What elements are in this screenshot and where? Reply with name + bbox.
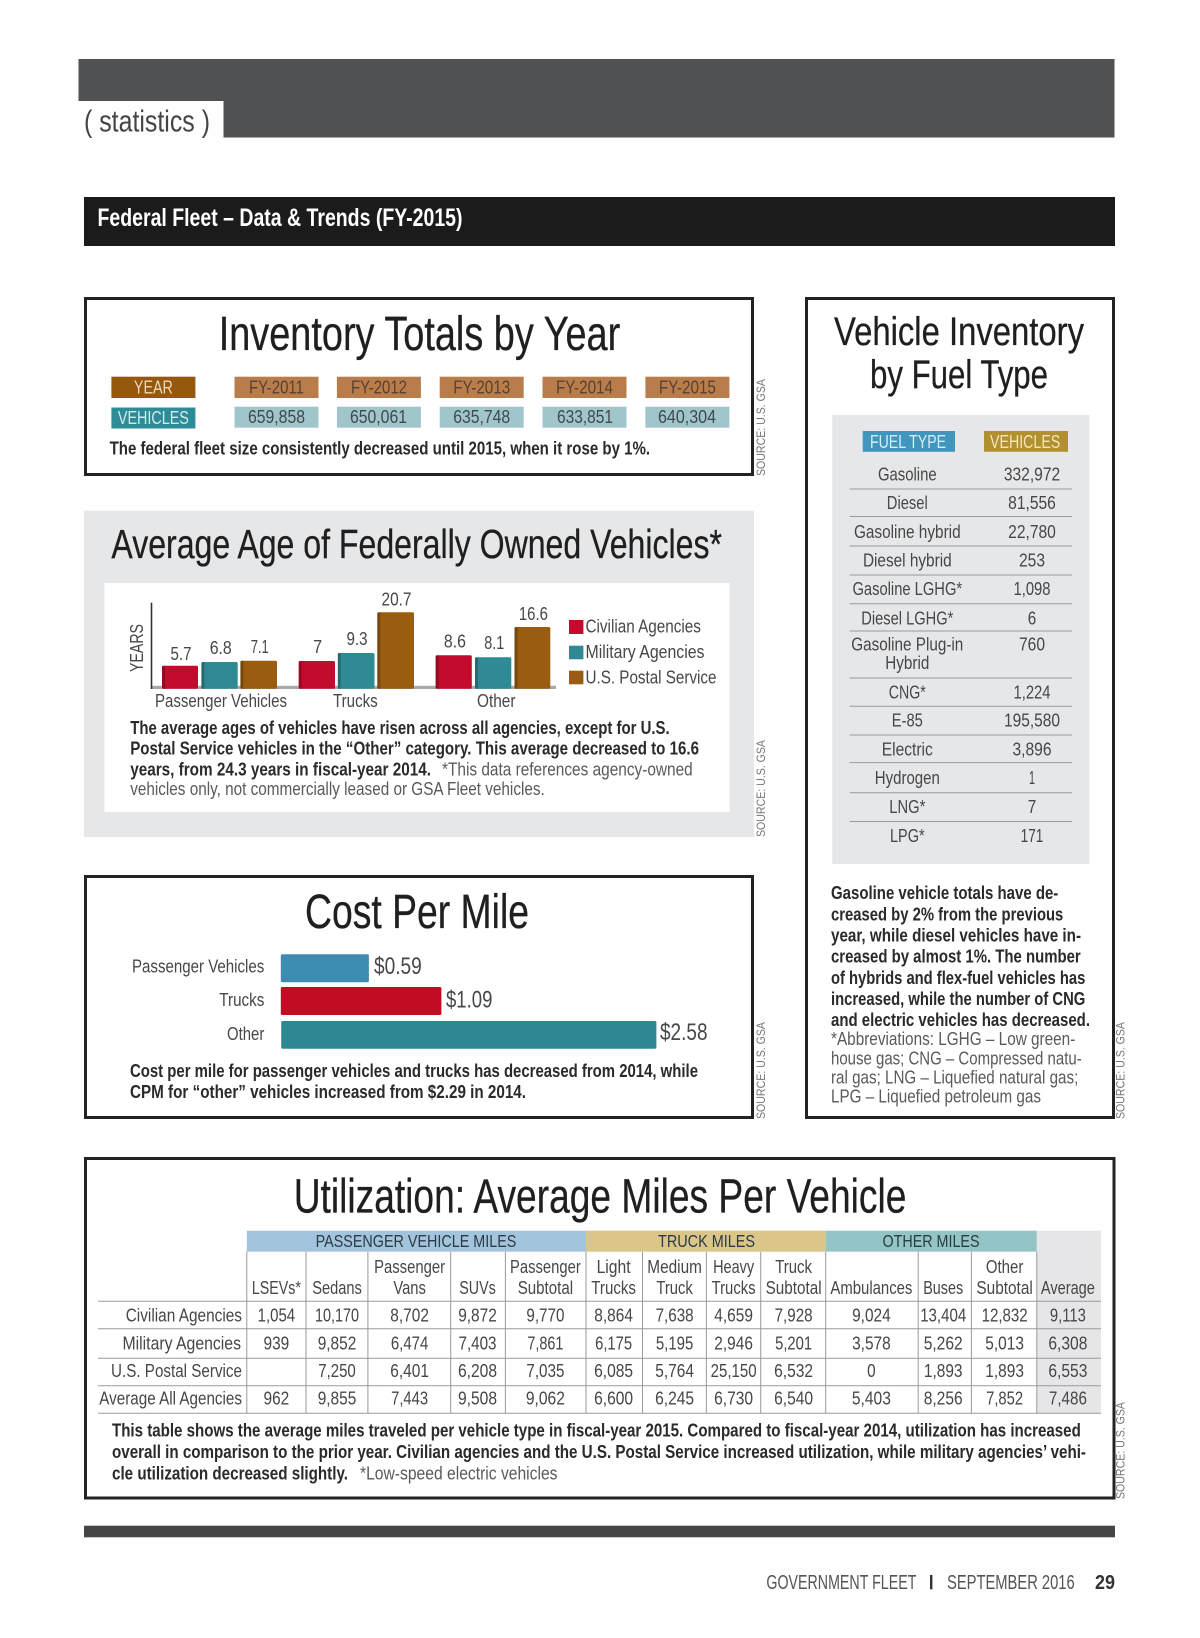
inventory table chips: 633,851 [557, 407, 613, 427]
utilization table: 7,486 [1049, 1388, 1087, 1408]
source credit: SOURCE: U.S. GSA [754, 1022, 768, 1119]
utilization table: 7,861 [527, 1333, 563, 1353]
utilization table: 9,508 [458, 1388, 497, 1408]
source credit: SOURCE: U.S. GSA [1114, 1022, 1128, 1119]
inventory table chips: FY-2011 [249, 378, 304, 398]
bar chart: average age: 16.6 [519, 604, 548, 624]
note: fuel type: *Abbreviations: LGHG – Low green- [831, 1029, 1075, 1049]
note: utilization [112, 1421, 1086, 1483]
utilization table: 7,403 [458, 1333, 496, 1353]
fuel type table: LNG* [889, 797, 925, 817]
utilization table: 9,855 [318, 1388, 356, 1408]
heading: fuel type [834, 310, 1084, 397]
bar chart: cost per mile: Trucks [219, 990, 264, 1010]
source credit: SOURCE: U.S. GSA [754, 379, 768, 476]
utilization table: PASSENGER VEHICLE MILES [316, 1231, 516, 1251]
utilization table: 5,403 [852, 1388, 891, 1408]
utilization table: Civilian Agencies [126, 1306, 242, 1326]
utilization table: Passenger [374, 1257, 445, 1277]
fuel type table [832, 415, 1089, 864]
title bar: Federal Fleet – Data & Trends (FY-2015) [98, 204, 462, 232]
fuel type table: Gasoline hybrid [854, 522, 961, 542]
utilization table: 10,170 [315, 1306, 359, 1326]
utilization table: 6,401 [390, 1361, 429, 1381]
utilization table: OTHER MILES [882, 1231, 980, 1251]
note: utilization: *Low-speed electric vehicles [360, 1463, 558, 1483]
note: average age: Postal Service vehicles in the “Other” category. This average decreased to 16.6 [130, 738, 699, 758]
fuel type table: VEHICLES [990, 432, 1060, 452]
fuel type table: 1,098 [1014, 579, 1050, 599]
utilization table: Buses [923, 1278, 963, 1298]
fuel type table: 253 [1019, 550, 1045, 570]
footer text [766, 1572, 1115, 1594]
header band [78, 59, 1114, 138]
fuel type table: Diesel hybrid [863, 550, 952, 570]
legend: Civilian Agencies [586, 617, 701, 637]
note: fuel type: of hybrids and flex-fuel vehicles has [831, 968, 1085, 988]
utilization table: 9,113 [1050, 1306, 1086, 1326]
inventory table chips: YEAR [134, 378, 173, 398]
utilization table: 7,443 [391, 1388, 428, 1408]
utilization table: 6,245 [655, 1388, 694, 1408]
bar chart: cost per mile: Other [227, 1024, 264, 1044]
note: average age: The average ages of vehicles have risen across all agencies, except for U.S. [130, 718, 670, 738]
heading: inventory totals: Inventory Totals by Year [219, 308, 620, 361]
note: average age: years, from 24.3 years in fiscal-year 2014. [130, 760, 431, 780]
bar chart: average age: 8.1 [484, 633, 504, 653]
utilization table: Average All Agencies [99, 1388, 242, 1408]
note: average age: *This data references agency-owned [442, 760, 693, 780]
utilization table: 25,150 [711, 1361, 757, 1381]
fuel type table: Hybrid [885, 653, 929, 673]
utilization table: 9,024 [852, 1306, 891, 1326]
utilization table: Other [986, 1257, 1023, 1277]
utilization table: 8,702 [390, 1306, 429, 1326]
fuel type table: 22,780 [1008, 522, 1056, 542]
title bar [84, 197, 1115, 246]
fuel type table: Diesel [887, 493, 928, 513]
fuel type table: 1 [1029, 768, 1035, 788]
inventory table chips: VEHICLES [118, 408, 189, 428]
heading: fuel type: Vehicle Inventory [834, 310, 1084, 354]
inventory table chips: 640,304 [658, 407, 716, 427]
fuel type table: Gasoline [878, 464, 937, 484]
utilization table: Average [1041, 1278, 1095, 1298]
bar chart: average age: 20.7 [382, 590, 412, 610]
fuel type table: 6 [1028, 608, 1036, 628]
bar chart: average age [127, 590, 556, 711]
heading: fuel type: by Fuel Type [870, 353, 1048, 397]
utilization table [98, 1231, 1101, 1413]
note: fuel type: Gasoline vehicle totals have de- [831, 883, 1058, 903]
inventory table chips: FY-2013 [453, 378, 510, 398]
utilization table: Military Agencies [122, 1333, 241, 1353]
bar chart: average age: 8.6 [444, 632, 466, 652]
footer text: SEPTEMBER 2016 [947, 1572, 1075, 1594]
utilization table: 6,175 [595, 1333, 632, 1353]
utilization table: 6,085 [594, 1361, 633, 1381]
utilization table: 13,404 [920, 1306, 966, 1326]
fuel type table: 7 [1028, 797, 1036, 817]
legend [569, 617, 716, 687]
utilization table: 5,262 [924, 1333, 963, 1353]
heading: cost per mile: Cost Per Mile [305, 886, 529, 939]
fuel type table: Electric [882, 739, 933, 759]
panel: utilization [86, 1158, 1128, 1499]
utilization table: LSEVs* [252, 1278, 301, 1298]
utilization table: 6,532 [774, 1361, 813, 1381]
note: cost per mile [130, 1061, 698, 1102]
utilization table: 6,208 [458, 1361, 497, 1381]
inventory table chips: 635,748 [453, 407, 510, 427]
note: cost per mile: Cost per mile for passenger vehicles and trucks has decreased from 2014, while [130, 1061, 698, 1081]
utilization table: 6,553 [1048, 1361, 1087, 1381]
utilization table: 6,540 [774, 1388, 813, 1408]
utilization table: 1,893 [985, 1361, 1024, 1381]
utilization table: 9,852 [318, 1333, 356, 1353]
panel: vehicle inventory by fuel type [806, 298, 1128, 1119]
fuel type table: 171 [1021, 826, 1043, 846]
note: fuel type: creased by 2% from the previous [831, 904, 1063, 924]
fuel type table: 760 [1019, 634, 1045, 654]
fuel type table: Gasoline LGHG* [852, 579, 962, 599]
utilization table: 9,872 [458, 1306, 497, 1326]
utilization table: 5,201 [775, 1333, 812, 1353]
legend: U.S. Postal Service [586, 667, 716, 687]
utilization table: Trucks [591, 1278, 636, 1298]
bar chart: average age: 7.1 [251, 637, 269, 657]
utilization table: 9,770 [526, 1306, 564, 1326]
footer text: 29 [1095, 1572, 1115, 1594]
fuel type table: 81,556 [1008, 493, 1056, 513]
utilization table: Trucks [712, 1278, 756, 1298]
utilization table: 7,035 [526, 1361, 564, 1381]
utilization table: 12,832 [982, 1306, 1028, 1326]
inventory table chips: 659,858 [248, 407, 305, 427]
note: utilization: cle utilization decreased slightly. [112, 1463, 348, 1483]
inventory table chips: FY-2014 [556, 378, 613, 398]
utilization table: Ambulances [830, 1278, 912, 1298]
fuel type table: E-85 [892, 710, 923, 730]
utilization table: 1,054 [258, 1306, 295, 1326]
note: fuel type: creased by almost 1%. The number [831, 947, 1081, 967]
utilization table: 7,638 [656, 1306, 694, 1326]
bar chart: cost per mile [132, 953, 708, 1049]
fuel type table: LPG* [890, 826, 925, 846]
panel: cost per mile [86, 876, 768, 1119]
bar chart: average age: Passenger Vehicles [155, 691, 287, 711]
utilization table: 6,600 [594, 1388, 633, 1408]
utilization table: Heavy [713, 1257, 754, 1277]
fuel type table: CNG* [889, 682, 926, 702]
utilization table: 2,946 [714, 1333, 753, 1353]
utilization table: Light [597, 1257, 631, 1277]
bar chart: cost per mile: $2.58 [660, 1019, 708, 1046]
utilization table: 939 [264, 1333, 289, 1353]
bar chart: cost per mile: Passenger Vehicles [132, 957, 264, 977]
note: fuel type: year, while diesel vehicles have in- [831, 925, 1081, 945]
fuel type table: Hydrogen [875, 768, 940, 788]
note: fuel type: ral gas; LNG – Liquefied natural gas; [831, 1068, 1078, 1088]
inventory table chips: FY-2015 [659, 378, 716, 398]
utilization table: 6,474 [391, 1333, 428, 1353]
bar chart: average age: 7 [313, 637, 322, 657]
utilization table: Truck [775, 1257, 813, 1277]
utilization table: 6,308 [1048, 1333, 1087, 1353]
fuel type table: Diesel LGHG* [861, 608, 953, 628]
utilization table: Vans [393, 1278, 426, 1298]
utilization table: 4,659 [714, 1306, 753, 1326]
legend: Military Agencies [586, 642, 704, 662]
note: fuel type: house gas; CNG – Compressed natu- [831, 1048, 1082, 1068]
utilization table: 7,928 [775, 1306, 813, 1326]
utilization table: 8,256 [924, 1388, 963, 1408]
inventory table chips: 650,061 [350, 407, 407, 427]
utilization table: Subtotal [976, 1278, 1033, 1298]
utilization table: 1,893 [924, 1361, 962, 1381]
bar chart: average age: 5.7 [170, 644, 192, 664]
heading: average age: Average Age of Federally Owned Vehicles* [111, 521, 722, 567]
utilization table: 5,764 [655, 1361, 694, 1381]
note: cost per mile: CPM for “other” vehicles increased from $2.29 in 2014. [130, 1082, 526, 1102]
utilization table: U.S. Postal Service [111, 1361, 242, 1381]
bar chart: cost per mile: $0.59 [374, 953, 422, 980]
note: average age: vehicles only, not commercially leased or GSA Fleet vehicles. [130, 779, 545, 799]
panel: average age [84, 511, 768, 837]
section tag: statistics: ( statistics ) [84, 104, 210, 138]
source credit: SOURCE: U.S. GSA [1114, 1402, 1128, 1499]
inventory table chips [111, 377, 729, 428]
fuel type table: 195,580 [1004, 710, 1060, 730]
fuel type table: Gasoline Plug-in [851, 634, 963, 654]
bar chart: average age: 6.8 [210, 638, 232, 658]
panel: inventory totals by year [86, 298, 768, 476]
note: fuel type [831, 883, 1090, 1107]
fuel type table: FUEL TYPE [870, 432, 946, 452]
fuel type table: 332,972 [1004, 464, 1060, 484]
utilization table: 0 [867, 1361, 876, 1381]
utilization table: 962 [264, 1388, 289, 1408]
bar chart: average age: Other [477, 691, 516, 711]
utilization table: Subtotal [766, 1278, 822, 1298]
source credit: SOURCE: U.S. GSA [754, 740, 768, 837]
note: inventory: The federal fleet size consistently decreased until 2015, when it rose by 1%. [110, 438, 650, 458]
utilization table: 3,578 [852, 1333, 891, 1353]
utilization table: 7,852 [986, 1388, 1023, 1408]
utilization table: SUVs [459, 1278, 496, 1298]
utilization table: 7,250 [318, 1361, 356, 1381]
footer text: GOVERNMENT FLEET [766, 1572, 916, 1594]
utilization table: 5,195 [656, 1333, 693, 1353]
utilization table: 6,730 [714, 1388, 753, 1408]
utilization table: Truck [656, 1278, 694, 1298]
bar chart: average age: Trucks [333, 691, 378, 711]
utilization table: 9,062 [526, 1388, 565, 1408]
utilization table: Subtotal [518, 1278, 573, 1298]
utilization table: TRUCK MILES [658, 1231, 755, 1251]
inventory table chips: FY-2012 [351, 378, 407, 398]
fuel type table: 3,896 [1012, 739, 1052, 759]
utilization table: Sedans [312, 1278, 362, 1298]
note: fuel type: and electric vehicles has decreased. [831, 1010, 1090, 1030]
footer band [84, 1526, 1115, 1537]
fuel type table: 1,224 [1014, 682, 1050, 702]
note: fuel type: LPG – Liquefied petroleum gas [831, 1087, 1041, 1107]
bar chart: average age: 9.3 [346, 629, 368, 649]
heading: utilization: Utilization: Average Miles Per Vehicle [294, 1171, 906, 1224]
utilization table: Passenger [510, 1257, 581, 1277]
utilization table: 8,864 [594, 1306, 633, 1326]
utilization table: 5,013 [985, 1333, 1024, 1353]
note: average age [130, 718, 699, 799]
note: fuel type: increased, while the number of CNG [831, 989, 1085, 1009]
utilization table: Medium [647, 1257, 702, 1277]
bar chart: average age: YEARS [127, 624, 147, 672]
bar chart: cost per mile: $1.09 [446, 986, 492, 1014]
